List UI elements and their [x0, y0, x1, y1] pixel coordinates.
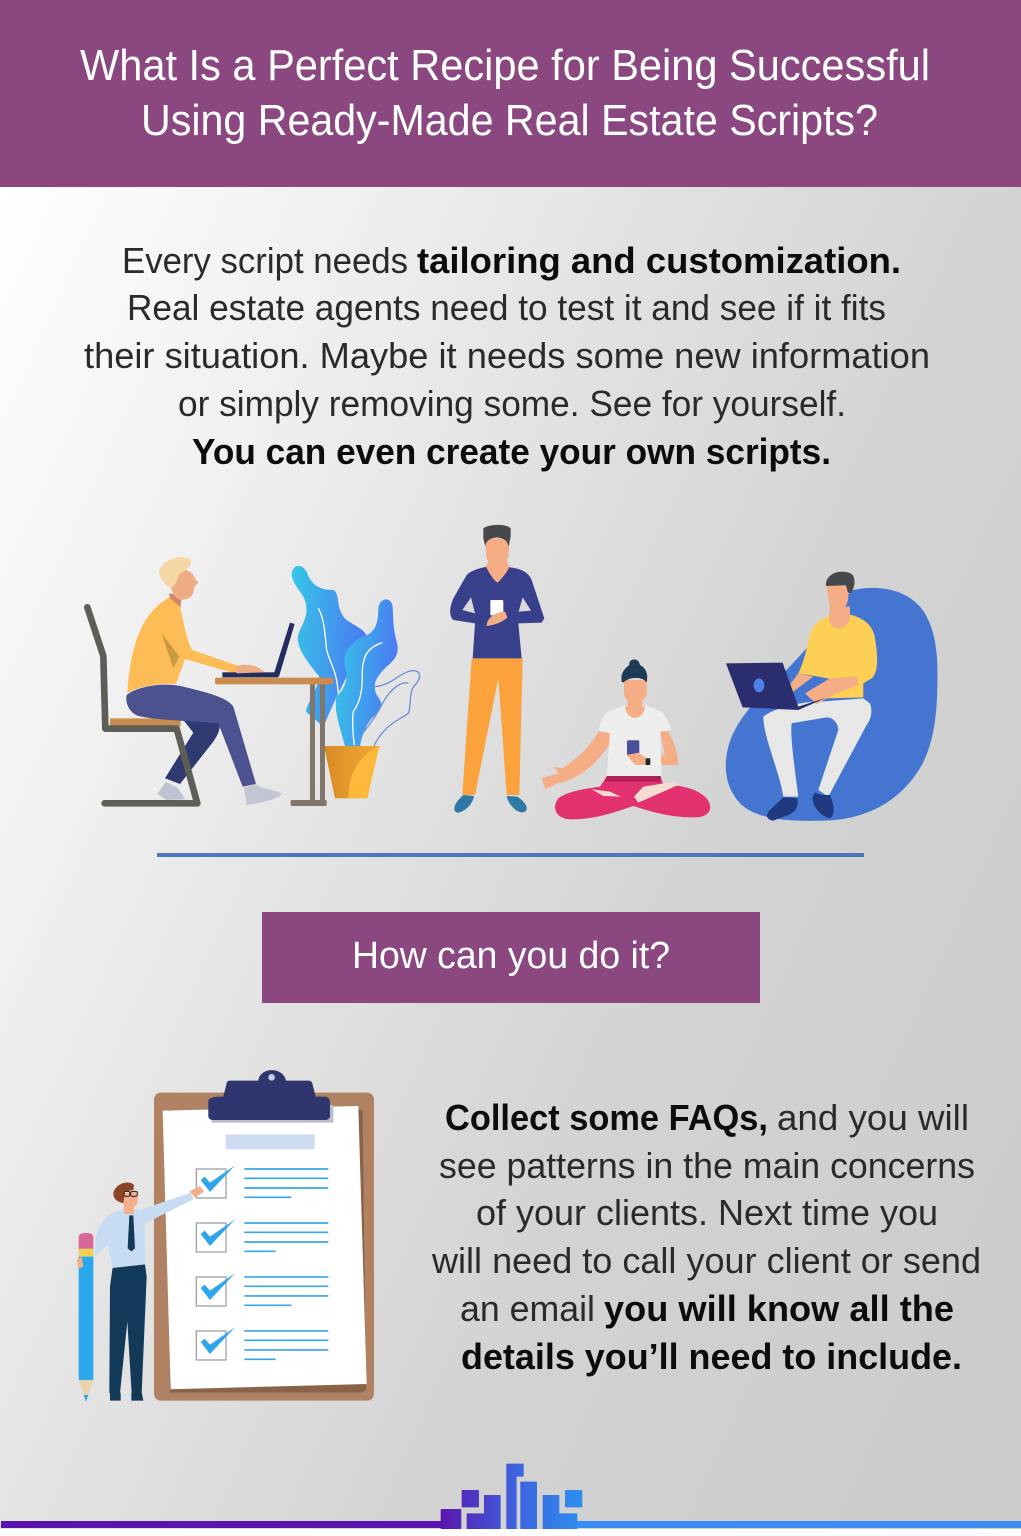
FAQ text block: Collect some FAQs,: [445, 1097, 768, 1138]
illustration: clipboard checklist with man and pencil: [77, 1070, 374, 1402]
desk: [215, 678, 333, 806]
icon: pot: [324, 746, 379, 798]
figure: seated man: [126, 557, 295, 805]
intro text block: [84, 240, 930, 472]
divider line: [157, 853, 864, 857]
FAQ text block: an email: [460, 1288, 595, 1329]
figure: man on beanbag: [726, 572, 938, 821]
figure: standing man: [450, 525, 544, 813]
FAQ text block: [431, 1097, 981, 1377]
button: How can you do it?: [262, 912, 760, 1003]
icon: pencil: [77, 1233, 93, 1402]
title banner: Using Ready-Made Real Estate Scripts?: [141, 96, 878, 145]
chair and far leg: [87, 607, 220, 803]
icon: clipboard: [154, 1070, 374, 1401]
icon: plant: [292, 566, 420, 798]
illustration: three people with phones and laptop: [450, 525, 938, 821]
figure: man with glasses pointing: [94, 1183, 204, 1401]
icon: beanbag: [726, 588, 938, 821]
FAQ text block: will need to call your client or send: [431, 1240, 981, 1281]
intro text block: tailoring and customization.: [417, 240, 901, 281]
intro text block: Real estate agents need to test it and see if it fits: [127, 287, 886, 328]
intro text block: or simply removing some. See for yourself.: [178, 383, 846, 424]
figure: meditating woman: [542, 659, 710, 819]
white bottom strip: [0, 1529, 1021, 1536]
checklist row 4: [196, 1327, 328, 1360]
FAQ text block: you will know all the: [604, 1288, 954, 1329]
FAQ text block: details you’ll need to include.: [461, 1336, 962, 1377]
FAQ text block: see patterns in the main concerns: [439, 1145, 975, 1186]
checklist row 1: [196, 1165, 328, 1198]
FAQ text block: and you will: [777, 1097, 969, 1138]
icon: laptop: [726, 663, 827, 710]
title banner: What Is a Perfect Recipe for Being Successful: [80, 41, 930, 90]
footer line and logo: [1, 1464, 1021, 1529]
button: How can you do it?: How can you do it?: [352, 935, 670, 977]
title banner: [0, 0, 1021, 187]
illustration: man working at desk with plant: [87, 557, 420, 806]
intro text block: You can even create your own scripts.: [192, 431, 831, 472]
checklist row 2: [196, 1219, 328, 1252]
FAQ text block: of your clients. Next time you: [476, 1192, 938, 1233]
intro text block: their situation. Maybe it needs some new information: [84, 335, 930, 376]
intro text block: Every script needs: [122, 240, 408, 281]
icon: logo bars: [441, 1464, 582, 1529]
checklist row 3: [196, 1273, 328, 1306]
